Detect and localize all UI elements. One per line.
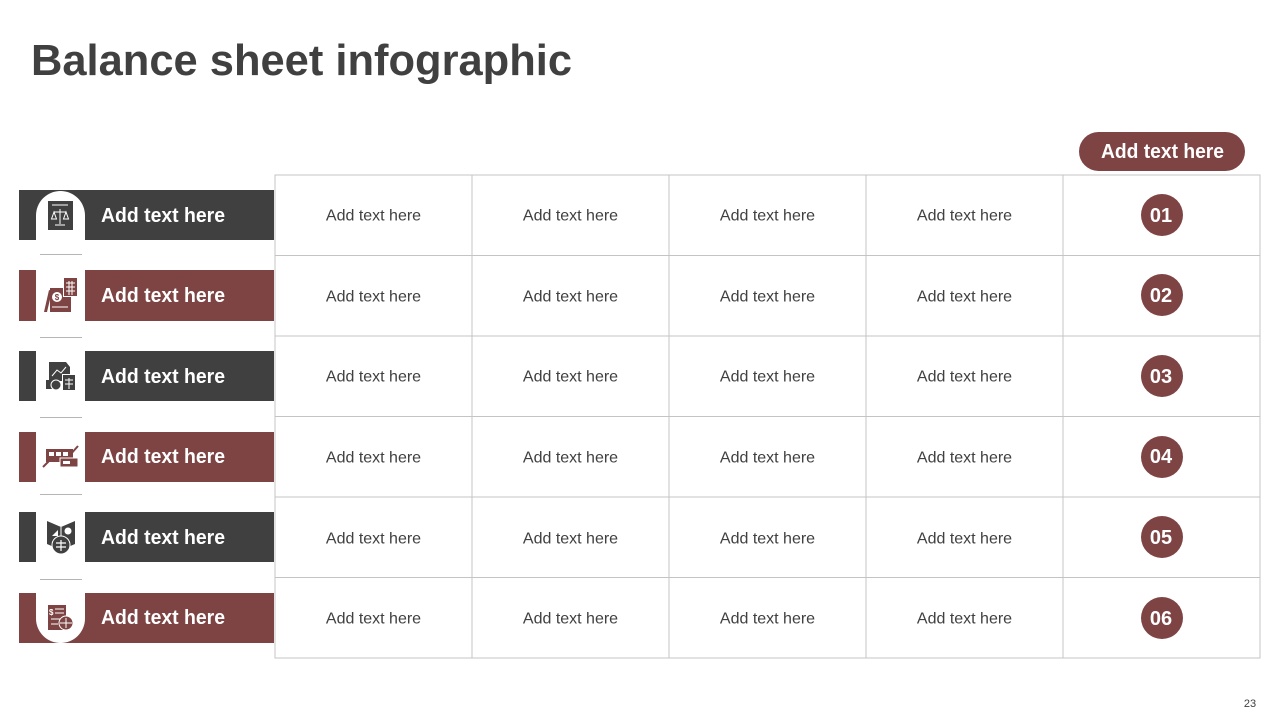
row 2 cells: Add text here	[523, 288, 618, 306]
title: Balance sheet infographic	[31, 36, 572, 85]
row label bars	[19, 190, 274, 643]
badge 03	[1141, 355, 1183, 397]
row 6 cells: Add text here	[720, 610, 815, 628]
header pill	[1079, 132, 1245, 171]
icon: invoice with scales: $	[49, 608, 54, 617]
header pill: Add text here	[1101, 141, 1224, 163]
row 1 cells	[326, 208, 1012, 224]
row 1 cells: Add text here	[523, 208, 618, 224]
bar 4	[19, 432, 274, 482]
bar 2	[19, 270, 274, 321]
row 6 cells: Add text here	[917, 610, 1012, 628]
badge 04: 04	[1150, 446, 1173, 468]
bar 4: Add text here	[101, 446, 225, 468]
badge 02: 02	[1150, 285, 1172, 307]
row 3 cells: Add text here	[326, 368, 421, 386]
badge 06	[1141, 597, 1183, 639]
row 4 cells: Add text here	[326, 450, 421, 466]
page number: 23	[1244, 698, 1256, 710]
row 5 cells: Add text here	[720, 530, 815, 548]
bar 2: Add text here	[101, 285, 225, 307]
badge 01: 01	[1150, 205, 1172, 227]
row 6 cells: Add text here	[326, 610, 421, 628]
row 1 cells: Add text here	[917, 208, 1012, 224]
row 2 cells: Add text here	[720, 288, 815, 306]
icon: ledger and calculator	[44, 277, 78, 312]
row 2 cells: Add text here	[917, 288, 1012, 306]
row 4 cells: Add text here	[720, 450, 815, 466]
row 4 cells	[326, 450, 1012, 466]
badge 02	[1141, 274, 1183, 316]
icon: open book with calculator	[47, 521, 75, 554]
icon: report, coins and calculator	[46, 362, 76, 390]
row 6 cells: Add text here	[523, 610, 618, 628]
badge 01	[1141, 194, 1183, 236]
row 2 cells	[326, 288, 1012, 306]
row 2 cells: Add text here	[326, 288, 421, 306]
row 3 cells: Add text here	[917, 368, 1012, 386]
row 5 cells: Add text here	[326, 530, 421, 548]
row 6 cells	[326, 610, 1012, 628]
bar 5: Add text here	[101, 527, 225, 549]
badge 05: 05	[1150, 527, 1172, 549]
row 5 cells	[326, 530, 1012, 548]
icon: ledger and calculator: $	[55, 293, 60, 302]
bar 5	[19, 512, 274, 562]
icon: law book with scales	[48, 201, 73, 230]
bar 3: Add text here	[101, 366, 225, 388]
bar 1	[19, 190, 274, 240]
badge 05	[1141, 516, 1183, 558]
row 5 cells: Add text here	[917, 530, 1012, 548]
row 3 cells: Add text here	[720, 368, 815, 386]
row 5 cells: Add text here	[523, 530, 618, 548]
bar 3	[19, 351, 274, 401]
icon: invoice with scales	[48, 605, 73, 630]
icon: board with arrow and coins	[43, 446, 78, 467]
table cell text	[326, 208, 1012, 628]
number badges	[1141, 194, 1183, 639]
white icon pill	[36, 191, 85, 643]
badge 04	[1141, 436, 1183, 478]
bar 6: Add text here	[101, 607, 225, 629]
row 3 cells	[326, 368, 1012, 386]
badge 06: 06	[1150, 608, 1172, 630]
row 1 cells: Add text here	[326, 208, 421, 224]
table grid	[275, 175, 1260, 658]
row 4 cells: Add text here	[917, 450, 1012, 466]
row 1 cells: Add text here	[720, 208, 815, 224]
row 4 cells: Add text here	[523, 450, 618, 466]
badge 03: 03	[1150, 366, 1172, 388]
bar 6	[19, 593, 274, 643]
row 3 cells: Add text here	[523, 368, 618, 386]
bar 1: Add text here	[101, 205, 225, 227]
